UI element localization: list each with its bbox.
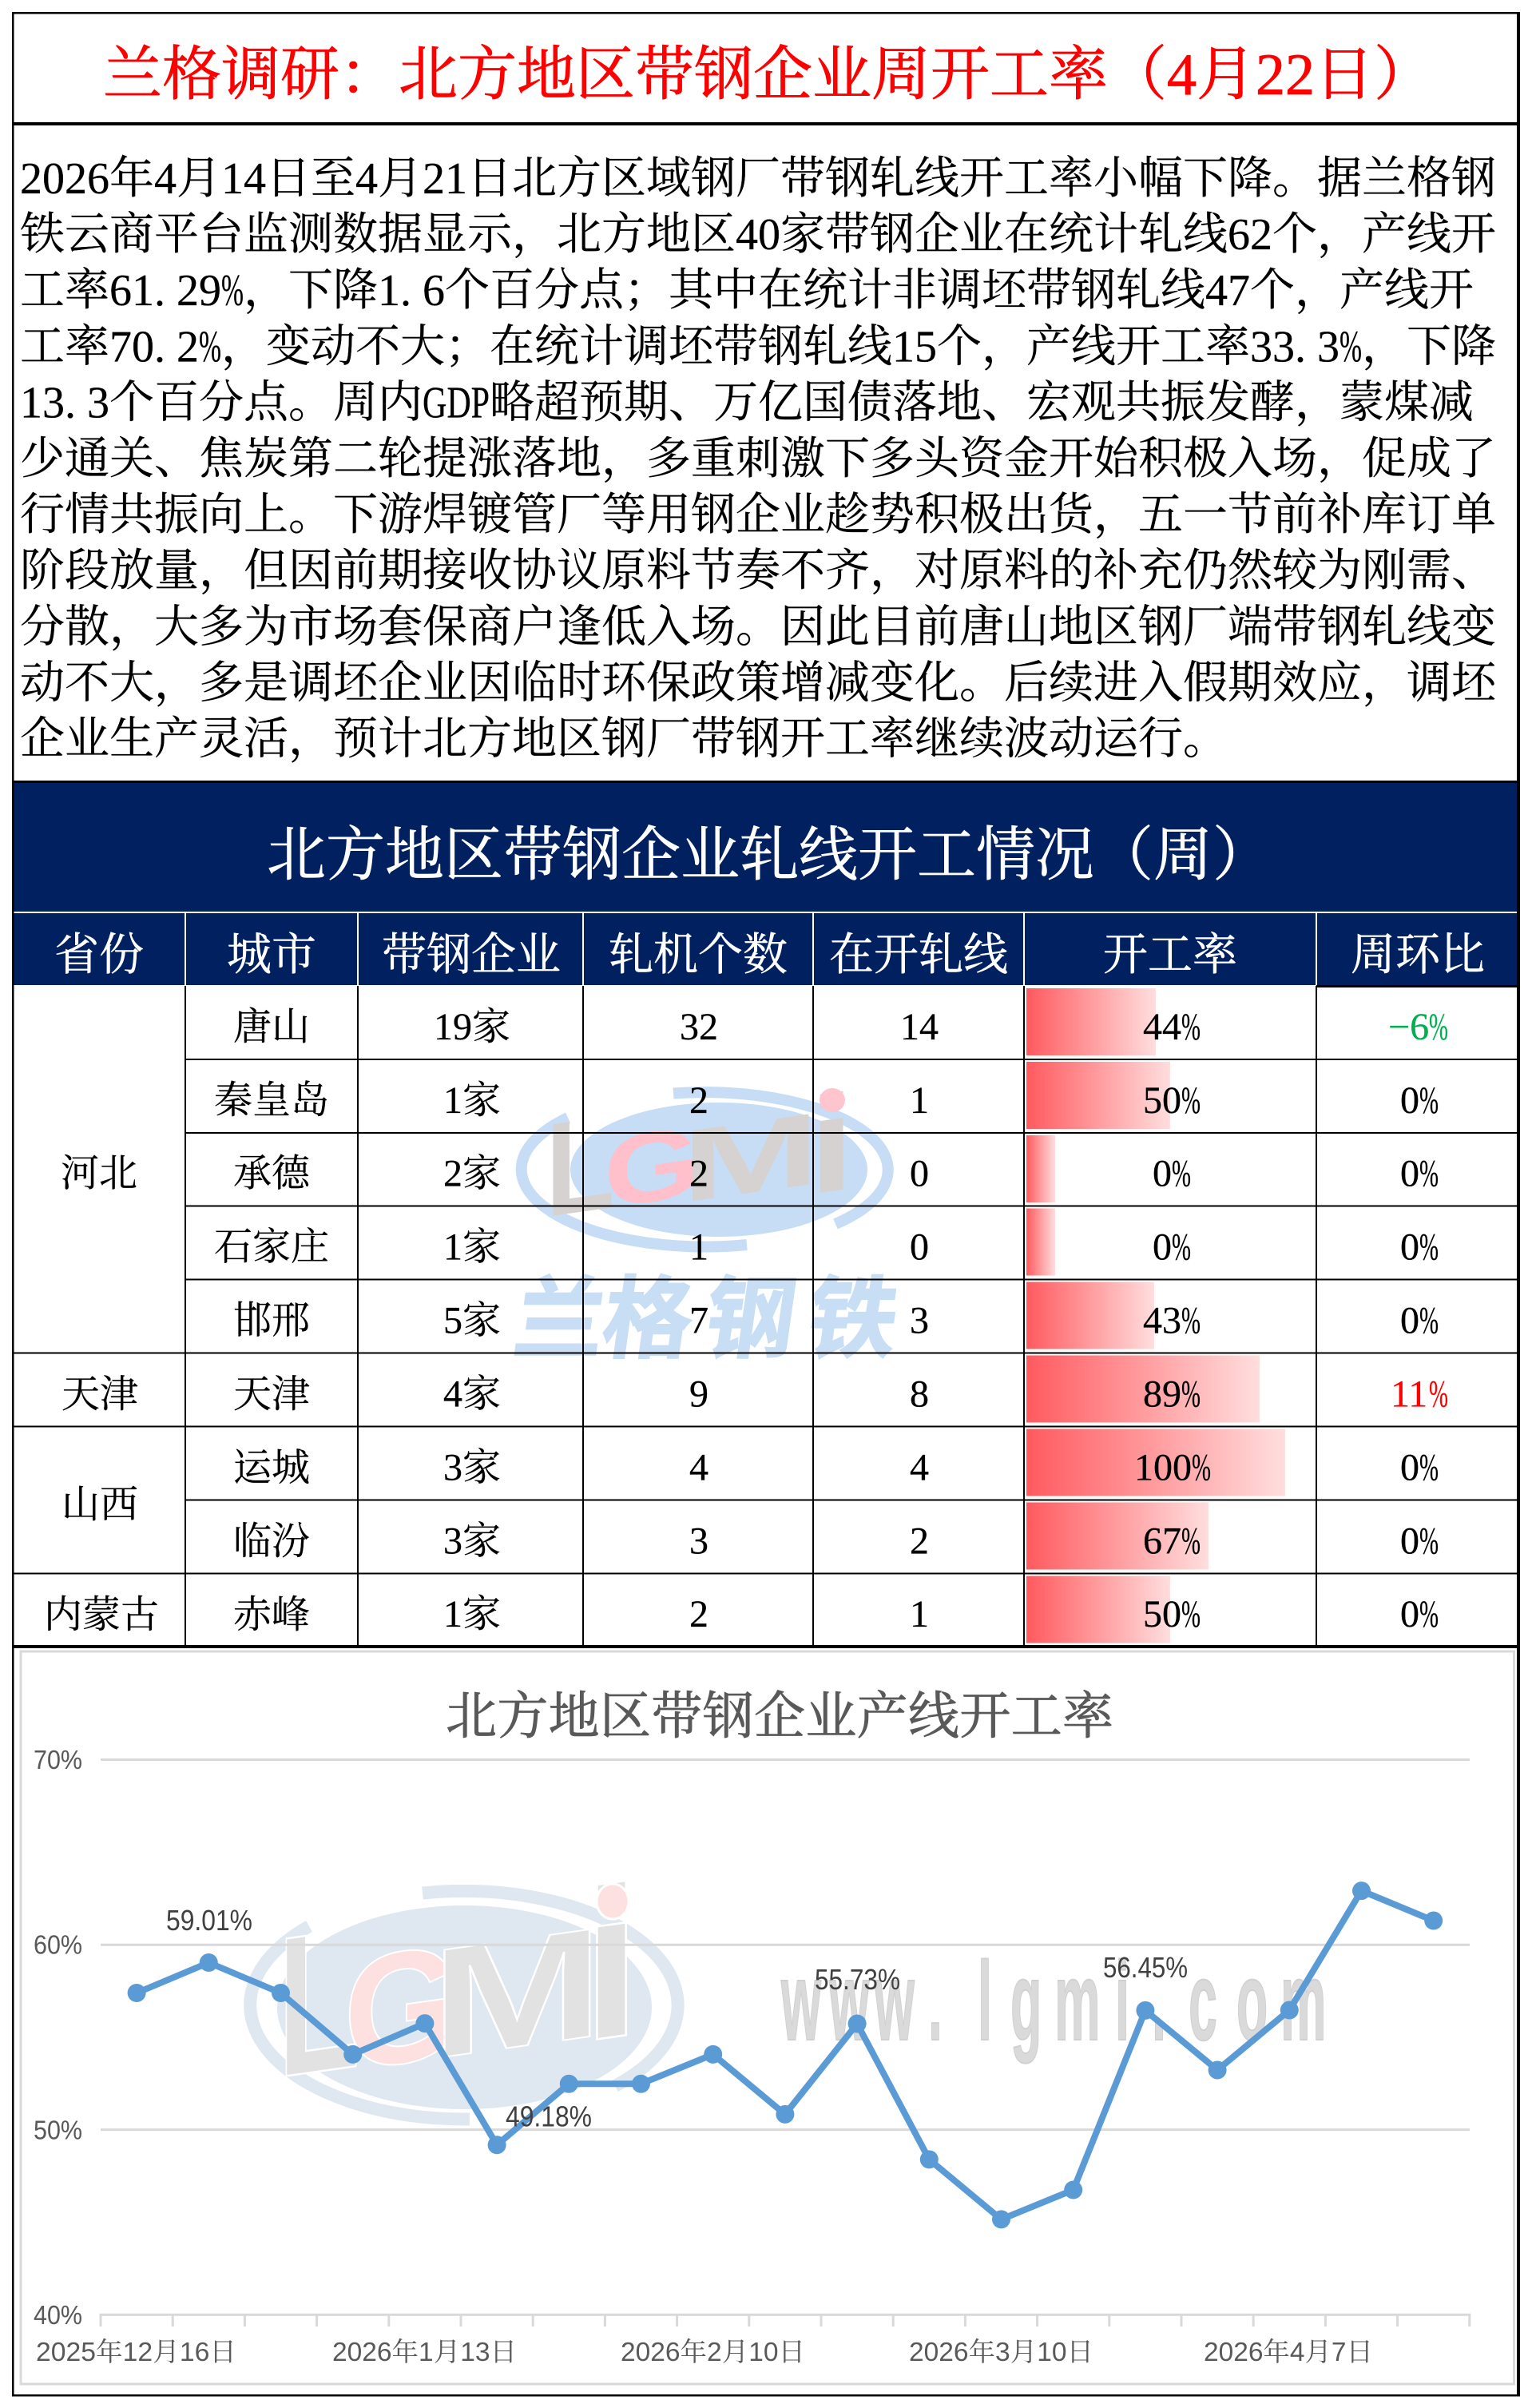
- row: 赤峰: 1家: [443, 1593, 501, 1635]
- text block: summary paragraph: [20, 154, 1497, 764]
- text block: summary paragraph: ，变动不大；在统计调坯带钢轧线15个，产线开工率: [221, 323, 1250, 372]
- row: 临汾: 67: [1143, 1520, 1181, 1563]
- watermark: LGMI logo in chart: G: [343, 1910, 462, 2105]
- row: 承德: 2家: [443, 1152, 501, 1195]
- watermark: LGMI logo in chart: L: [277, 1885, 360, 2120]
- row: 唐山: %: [1181, 1006, 1201, 1048]
- x axis labels: 2026年1月13日: [332, 2337, 517, 2366]
- text block: summary paragraph: 工率: [20, 266, 109, 316]
- row: 承德: [233, 1152, 1439, 1195]
- row: 承德: 0: [1400, 1152, 1419, 1195]
- text block: summary paragraph: 动不大，多是调坯企业因临时环保政策增减变化。后续进入假期效应，调坯: [20, 658, 1497, 708]
- row: 邯邢: [233, 1299, 1439, 1342]
- title: 兰格调研：北方地区带钢企业周开工率（4月22日）: [103, 42, 1433, 108]
- table header row: 省份: [54, 931, 144, 980]
- table header row: 周环比: [1351, 931, 1485, 980]
- row: 临汾: 0: [1400, 1520, 1419, 1563]
- row: 秦皇岛: %: [1181, 1079, 1201, 1122]
- text block: summary paragraph: %: [199, 323, 221, 372]
- row: 承德: 2: [689, 1152, 708, 1195]
- text block: summary paragraph: 1.6: [378, 266, 445, 316]
- y axis labels: 70%: [34, 1745, 82, 1774]
- row: 唐山: [233, 1006, 1448, 1048]
- table grid lines: [14, 986, 1518, 1646]
- data labels: [166, 1904, 1188, 2133]
- row: 秦皇岛: %: [1419, 1079, 1439, 1122]
- text block: summary paragraph: 工率: [20, 323, 109, 372]
- text block: summary paragraph: ，下降: [244, 266, 378, 316]
- row: 赤峰: 1: [910, 1593, 929, 1635]
- data labels: 59.01%: [166, 1904, 252, 1937]
- watermark: 兰格钢铁 in table: 兰格钢铁: [507, 1247, 907, 1377]
- table header row: 城市: [227, 931, 316, 980]
- watermark: LGMI logo in chart: i: [582, 1840, 641, 2087]
- text block: summary paragraph: 2026年4月14日至4月21日北方区域钢厂带钢轧线开工率小幅下降。据兰格钢: [20, 154, 1496, 204]
- row: 天津: %: [1429, 1373, 1448, 1416]
- row: 承德: 0: [1153, 1152, 1172, 1195]
- row: 石家庄: 1: [689, 1226, 708, 1269]
- watermark: website address: www.lgmi.com: [780, 1939, 1326, 2064]
- text block: summary paragraph: 13.3: [20, 379, 109, 428]
- x axis labels: 2026年3月10日: [909, 2337, 1093, 2366]
- row: 石家庄: 石家庄: [214, 1226, 329, 1269]
- watermark: LGMI logo in chart: [250, 1840, 678, 2120]
- text block: summary paragraph: 略超预期、万亿国债落地、宏观共振发酵，蒙煤减: [490, 379, 1474, 428]
- x axis labels: 2026年2月10日: [621, 2337, 805, 2366]
- table rows: [44, 1006, 1448, 1636]
- row: 邯邢: 邯邢: [233, 1299, 310, 1342]
- row: 运城: 3家: [443, 1446, 501, 1489]
- row: 天津: 4家: [443, 1373, 501, 1416]
- text block: summary paragraph: 少通关、焦炭第二轮提涨落地，多重刺激下多头资金开始积极入场，促成了: [20, 435, 1496, 484]
- row: 天津: 11: [1391, 1373, 1427, 1416]
- row: 临汾: %: [1181, 1520, 1201, 1563]
- table panel: rolling line status: [14, 783, 1518, 1646]
- row: 运城: 100: [1134, 1446, 1192, 1489]
- row: 赤峰: [233, 1593, 1439, 1636]
- row: 石家庄: %: [1172, 1226, 1191, 1269]
- row: 承德: %: [1172, 1152, 1191, 1195]
- row: 邯邢: 3: [910, 1299, 929, 1342]
- line series: [128, 1881, 1443, 2228]
- row: 石家庄: 0: [910, 1226, 929, 1269]
- chart panel: line chart of operating rate: [21, 1651, 1514, 2384]
- row: 运城: %: [1192, 1446, 1211, 1489]
- table header row: 轧机个数: [609, 931, 788, 980]
- row: 赤峰: 50: [1143, 1593, 1181, 1635]
- row: 天津: %: [1181, 1373, 1201, 1416]
- watermark: LGMI logo in table: i: [808, 1065, 855, 1223]
- text block: summary paragraph: %: [221, 266, 244, 316]
- table heading band: [14, 783, 1517, 912]
- table header row: 在开轧线: [829, 931, 1008, 980]
- x axis labels: 2025年12月16日: [36, 2337, 236, 2366]
- row: 承德: 承德: [233, 1152, 312, 1195]
- row: 天津: 9: [689, 1373, 708, 1416]
- text block: summary paragraph: ，下降: [1362, 323, 1496, 372]
- watermark: LGMI logo in table: L: [546, 1087, 615, 1245]
- row: 运城: %: [1419, 1446, 1439, 1489]
- text block: summary paragraph: GDP: [423, 379, 490, 428]
- watermark: LGMI logo in table: G: [604, 1105, 701, 1230]
- row: 石家庄: [214, 1226, 1439, 1269]
- text block: summary paragraph: 33.3: [1250, 323, 1340, 372]
- row: 天津: [233, 1373, 1448, 1416]
- row: 石家庄: 0: [1400, 1226, 1419, 1269]
- row: 秦皇岛: 秦皇岛: [214, 1079, 329, 1122]
- row: 赤峰: %: [1181, 1593, 1201, 1635]
- row: 运城: 4: [689, 1446, 708, 1489]
- row: 赤峰: 2: [689, 1593, 708, 1635]
- text block: summary paragraph: 阶段放量，但因前期接收协议原料节奏不齐，对原料的补充仍然较为刚需、: [20, 546, 1496, 596]
- text block: summary paragraph: 61.29: [109, 266, 221, 316]
- text block: summary paragraph: 分散，大多为市场套保商户逢低入场。因此目前唐山地区钢厂端带钢轧线变: [20, 602, 1496, 652]
- text block: summary paragraph: 行情共振向上。下游焊镀管厂等用钢企业趁势积极出货，五一节前补库订单: [20, 491, 1496, 540]
- y axis labels: 50%: [34, 2116, 82, 2144]
- row: 秦皇岛: 1家: [443, 1079, 501, 1122]
- row: 赤峰: %: [1419, 1593, 1439, 1635]
- row: 承德: 0: [910, 1152, 929, 1195]
- row: 唐山: 唐山: [233, 1006, 310, 1048]
- text block: summary paragraph: 个百分点；其中在统计非调坯带钢轧线47个，产线开: [445, 266, 1474, 316]
- chart title: 北方地区带钢企业产线开工率: [446, 1687, 1113, 1745]
- row: 临汾: 3: [689, 1520, 708, 1563]
- row: 唐山: 19家: [434, 1006, 510, 1048]
- y axis labels: 60%: [34, 1930, 82, 1960]
- table header row: [14, 913, 1517, 985]
- row: 邯邢: 5家: [443, 1299, 501, 1342]
- row: 邯邢: 0: [1400, 1299, 1419, 1342]
- data labels: 55.73%: [815, 1963, 900, 1996]
- row: 邯邢: 43: [1143, 1299, 1181, 1342]
- row: 临汾: 2: [910, 1520, 929, 1563]
- row: 运城: 4: [910, 1446, 929, 1489]
- data labels: 56.45%: [1103, 1951, 1188, 1984]
- text block: summary paragraph: 个百分点。周内: [109, 379, 423, 428]
- watermark: LGMI logo in table: M: [681, 1091, 820, 1224]
- row: 邯邢: %: [1181, 1299, 1201, 1342]
- row: 石家庄: 1家: [443, 1226, 501, 1269]
- row: 天津: 天津: [233, 1373, 310, 1416]
- province: 内蒙古: 内蒙古: [44, 1594, 159, 1636]
- table header row: 带钢企业: [382, 931, 561, 980]
- row: 运城: 运城: [233, 1447, 310, 1489]
- gridlines and y axis ticks: [99, 1759, 1471, 2327]
- text block: summary paragraph: 铁云商平台监测数据显示，北方地区40家带钢企业在统计轧线62个，产线开: [20, 210, 1496, 260]
- row: 承德: %: [1419, 1152, 1439, 1195]
- province: 山西: 山西: [62, 1484, 138, 1526]
- row: 邯邢: %: [1419, 1299, 1439, 1342]
- row: 唐山: 14: [900, 1006, 939, 1048]
- row: 临汾: [233, 1520, 1439, 1563]
- row: 秦皇岛: [214, 1079, 1439, 1122]
- row: 临汾: 3家: [443, 1520, 501, 1563]
- table header row: 开工率: [1103, 931, 1237, 980]
- province: 天津: 天津: [62, 1373, 138, 1416]
- row: 石家庄: %: [1419, 1226, 1439, 1269]
- row: 邯邢: 7: [689, 1299, 708, 1342]
- data labels: 49.18%: [506, 2100, 592, 2133]
- row: 唐山: %: [1429, 1006, 1448, 1048]
- row: 唐山: −6: [1388, 1006, 1429, 1048]
- row: 石家庄: 0: [1153, 1226, 1172, 1269]
- data bars: operating rate: [1026, 988, 1285, 1643]
- row: 临汾: 临汾: [233, 1520, 310, 1563]
- row: 秦皇岛: 2: [689, 1079, 708, 1122]
- row: 唐山: 44: [1143, 1006, 1181, 1048]
- row: 天津: 89: [1143, 1373, 1181, 1416]
- watermark: LGMI logo in chart: M: [431, 1894, 604, 2092]
- y axis labels: [34, 1745, 82, 2330]
- row: 秦皇岛: 50: [1143, 1079, 1181, 1122]
- row: 临汾: %: [1419, 1520, 1439, 1563]
- row: 运城: 0: [1400, 1446, 1419, 1489]
- y axis labels: 40%: [34, 2300, 82, 2330]
- text block: summary paragraph: 企业生产灵活，预计北方地区钢厂带钢开工率继续波动运行。: [20, 714, 1228, 764]
- row: 赤峰: 0: [1400, 1593, 1419, 1635]
- row: 运城: [233, 1446, 1439, 1489]
- watermark: LGMI logo in table: [522, 1065, 888, 1247]
- row: 赤峰: 赤峰: [233, 1594, 310, 1636]
- row: 唐山: 32: [680, 1006, 718, 1048]
- text block: summary paragraph: 70.2: [109, 323, 199, 372]
- x axis labels: [36, 2337, 1373, 2366]
- x axis labels: 2026年4月7日: [1204, 2337, 1373, 2366]
- text block: summary paragraph: %: [1340, 323, 1362, 372]
- province: 河北: 河北: [61, 1152, 137, 1195]
- table heading band: 北方地区带钢企业轧线开工情况（周）: [267, 823, 1272, 888]
- row: 秦皇岛: 0: [1400, 1079, 1419, 1122]
- row: 天津: 8: [910, 1373, 929, 1416]
- row: 秦皇岛: 1: [910, 1079, 929, 1122]
